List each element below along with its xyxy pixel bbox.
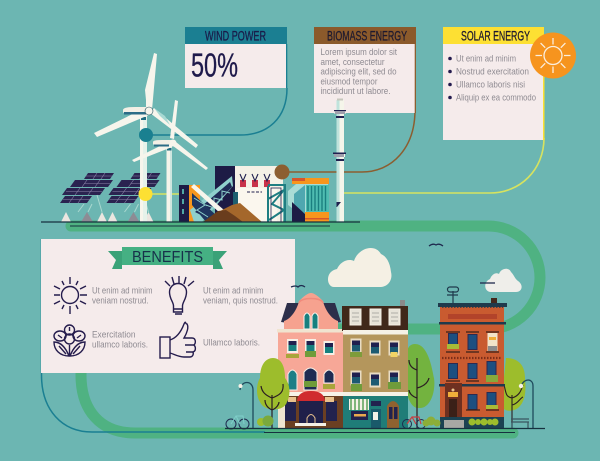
text: benefit one: Ut enim ad minim bbox=[92, 286, 152, 296]
icon: orange sun bbox=[530, 32, 576, 78]
icon: sun outline bbox=[54, 277, 87, 314]
text: biomass body: adipiscing elit, sed do bbox=[320, 66, 397, 76]
plant: dark block bbox=[215, 166, 235, 222]
ground line: power plant bbox=[41, 221, 360, 223]
plant: white building bbox=[235, 166, 283, 222]
heading: solar energy: SOLAR ENERGY bbox=[461, 28, 530, 44]
building: pink bbox=[277, 293, 343, 428]
text: benefit one bbox=[92, 286, 152, 306]
plant: conveyor bbox=[190, 176, 233, 222]
panel: biomass energy bbox=[314, 27, 416, 113]
wire: wind power bbox=[150, 88, 287, 135]
cloud large bbox=[328, 248, 391, 287]
panel: benefits bbox=[41, 239, 295, 373]
icon: wind turbine small bbox=[132, 100, 208, 222]
heading: wind power: WIND POWER bbox=[205, 28, 266, 44]
red: rooftop antenna bbox=[447, 287, 458, 303]
ribbon heading: benefits: BENEFITS bbox=[132, 249, 203, 266]
text: benefit three: ullamco laboris. bbox=[92, 340, 148, 350]
wire: biomass bbox=[285, 110, 415, 172]
bicycle right bbox=[402, 417, 426, 428]
list: solar bullets bbox=[448, 54, 536, 102]
number: 50%: 50% bbox=[191, 46, 238, 84]
plant: machine bbox=[288, 178, 329, 222]
icon: wind turbine large bbox=[94, 53, 198, 222]
text: benefit three bbox=[92, 330, 148, 350]
red: windows bbox=[439, 332, 505, 410]
plant: chimney bbox=[333, 98, 346, 222]
wire: solar to plant bbox=[150, 193, 182, 195]
cloud small bbox=[485, 269, 522, 292]
building: red brick bbox=[438, 287, 507, 428]
tree left of pink building bbox=[257, 358, 289, 428]
list: solar bullets: Nostrud exercitation bbox=[456, 66, 529, 76]
list: solar bullets: Ullamco laboris nisi bbox=[456, 80, 525, 90]
plant: orange block bbox=[189, 185, 200, 222]
heading: biomass energy: BIOMASS ENERGY bbox=[327, 28, 407, 44]
node: wind bbox=[139, 128, 153, 142]
plant: biomass mounds bbox=[203, 203, 262, 222]
lamp right bbox=[521, 380, 533, 428]
node: solar bbox=[138, 187, 152, 201]
wire: solar bbox=[344, 138, 544, 193]
icon: solar panels bbox=[60, 173, 160, 222]
lamp left bbox=[240, 382, 253, 428]
icon: light bulb bbox=[165, 276, 194, 314]
bicycle left bbox=[226, 416, 249, 429]
tan: shop front bbox=[349, 399, 399, 428]
tree behind tan building bbox=[405, 344, 434, 428]
text: benefit one: veniam nostrud. bbox=[92, 296, 148, 306]
pink: attic windows bbox=[304, 313, 318, 329]
ground line: city bbox=[225, 428, 545, 430]
text: biomass body: amet, consectetur bbox=[320, 57, 385, 67]
text: biomass body: incididunt ut labore. bbox=[320, 86, 390, 96]
green winding road bbox=[71, 226, 540, 433]
bench bbox=[511, 419, 529, 428]
text: benefit four: Ullamco laboris. bbox=[203, 338, 260, 348]
wire: benefits panel bbox=[42, 239, 265, 432]
list: solar bullets: Ut enim ad minim bbox=[456, 54, 516, 64]
text: biomass body: Lorem ipsum dolor sit bbox=[320, 47, 398, 57]
birds bbox=[291, 244, 495, 287]
shrubs right bbox=[422, 416, 440, 426]
text: benefit two: veniam, quis nostrud. bbox=[203, 296, 278, 306]
icon: thumbs up bbox=[160, 322, 195, 358]
list: solar bullets: Aliquip ex ea commodo bbox=[456, 92, 536, 102]
pink: shop front bbox=[285, 391, 337, 426]
building: tan bbox=[342, 300, 408, 428]
red: door bbox=[445, 383, 462, 422]
icon: flower bbox=[54, 325, 85, 356]
plant: dark tower bbox=[179, 185, 189, 222]
shrubs bbox=[257, 416, 274, 426]
text: benefit two bbox=[203, 286, 278, 306]
red: hedge bbox=[468, 418, 498, 426]
plant: red insulators bbox=[240, 174, 270, 187]
tan: windows bbox=[350, 338, 401, 391]
biomass plant bbox=[179, 98, 346, 222]
node: biomass bbox=[274, 164, 290, 180]
pink: windows bbox=[286, 339, 335, 390]
panel: wind power bbox=[185, 27, 287, 88]
text: biomass body bbox=[320, 47, 398, 96]
tree right of red building bbox=[501, 358, 525, 428]
text: biomass body: eiusmod tempor bbox=[320, 76, 378, 86]
ribbon heading: benefits bbox=[108, 247, 227, 269]
panel: solar energy bbox=[443, 27, 544, 140]
text: benefit two: Ut enim ad minim bbox=[203, 286, 264, 296]
plant: scaffold bbox=[268, 184, 286, 222]
text: benefit three: Exercitation bbox=[92, 330, 136, 340]
